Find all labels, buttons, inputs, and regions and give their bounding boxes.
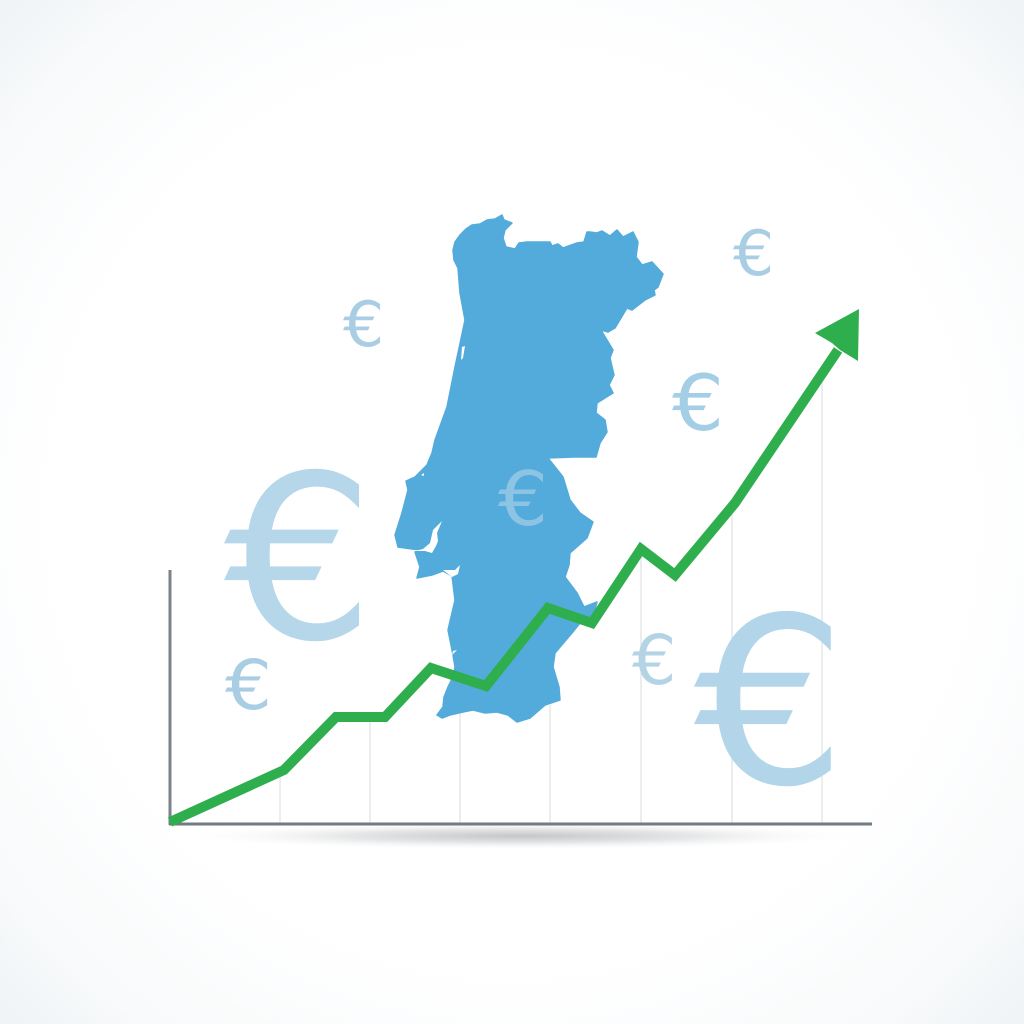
x axis — [169, 822, 872, 826]
Sado estuary — [443, 565, 460, 577]
ground shadow — [170, 822, 870, 850]
green growth arrow — [170, 309, 859, 822]
y axis — [168, 570, 172, 825]
map of Portugal — [395, 215, 663, 722]
small euro symbol lower left: € — [225, 645, 272, 725]
large euro symbol left: € — [224, 426, 375, 692]
small euro symbol top right: € — [733, 217, 774, 290]
arrowhead — [815, 309, 859, 361]
small euro symbol beside large euro: € — [632, 620, 677, 701]
Tagus estuary — [415, 521, 442, 553]
chart grid lines — [280, 380, 822, 823]
medium euro symbol right: € — [672, 358, 724, 449]
euro symbol on map: € — [498, 457, 548, 544]
small euro symbol upper left: € — [343, 288, 384, 361]
small coastal inlets — [421, 346, 465, 655]
large euro symbol right: € — [694, 568, 847, 838]
